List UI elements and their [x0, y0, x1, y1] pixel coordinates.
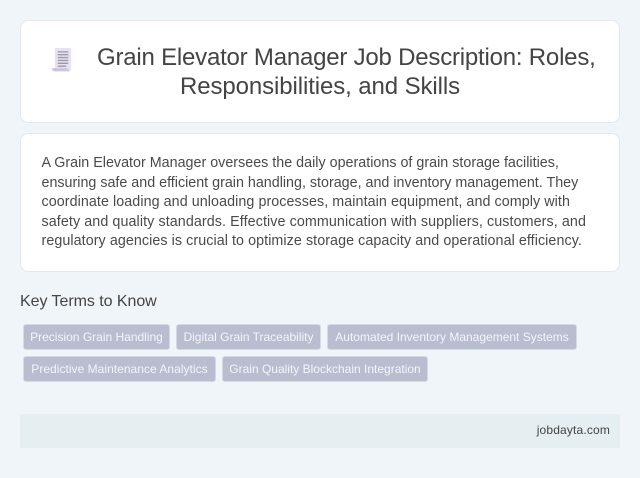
chip: predictive maintenance analytics: [23, 356, 216, 382]
description text: [42, 155, 586, 249]
chip: precision grain handling: [23, 324, 170, 350]
description text: ensuring safe and efficient grain handling, storage, and inventory management. They: [42, 174, 578, 190]
description text: safety and quality standards. Effective communication with suppliers, customers, and: [42, 214, 586, 230]
footer: [20, 414, 620, 448]
title: Grain Elevator Manager Job Description: Roles,: [97, 44, 596, 71]
icon: document scroll: [52, 48, 71, 72]
chip: automated inventory management systems: Automated Inventory Management Systems: [335, 330, 569, 344]
chip: digital grain traceability: [176, 324, 321, 350]
chip: digital grain traceability: Digital Grain Traceability: [183, 330, 314, 344]
heading: key terms: Key Terms to Know: [20, 293, 157, 310]
description text: regulatory agencies is crucial to optimize storage capacity and operational efficiency.: [42, 233, 582, 249]
panel: header: [20, 20, 620, 123]
panel: description: [20, 133, 620, 272]
chip: precision grain handling: Precision Grain Handling: [30, 330, 163, 344]
chip: grain quality blockchain integration: Grain Quality Blockchain Integration: [229, 362, 421, 376]
description text: A Grain Elevator Manager oversees the daily operations of grain storage facilities,: [42, 155, 559, 171]
chip: automated inventory management systems: [327, 324, 577, 350]
chip: grain quality blockchain integration: [222, 356, 428, 382]
description text: coordinate loading and unloading processes, maintain equipment, and comply with: [42, 194, 570, 210]
footer site name: jobdayta.com: [537, 423, 610, 437]
title: Responsibilities, and Skills: [180, 73, 460, 100]
chip: predictive maintenance analytics: Predictive Maintenance Analytics: [31, 362, 208, 376]
title: [97, 44, 596, 100]
